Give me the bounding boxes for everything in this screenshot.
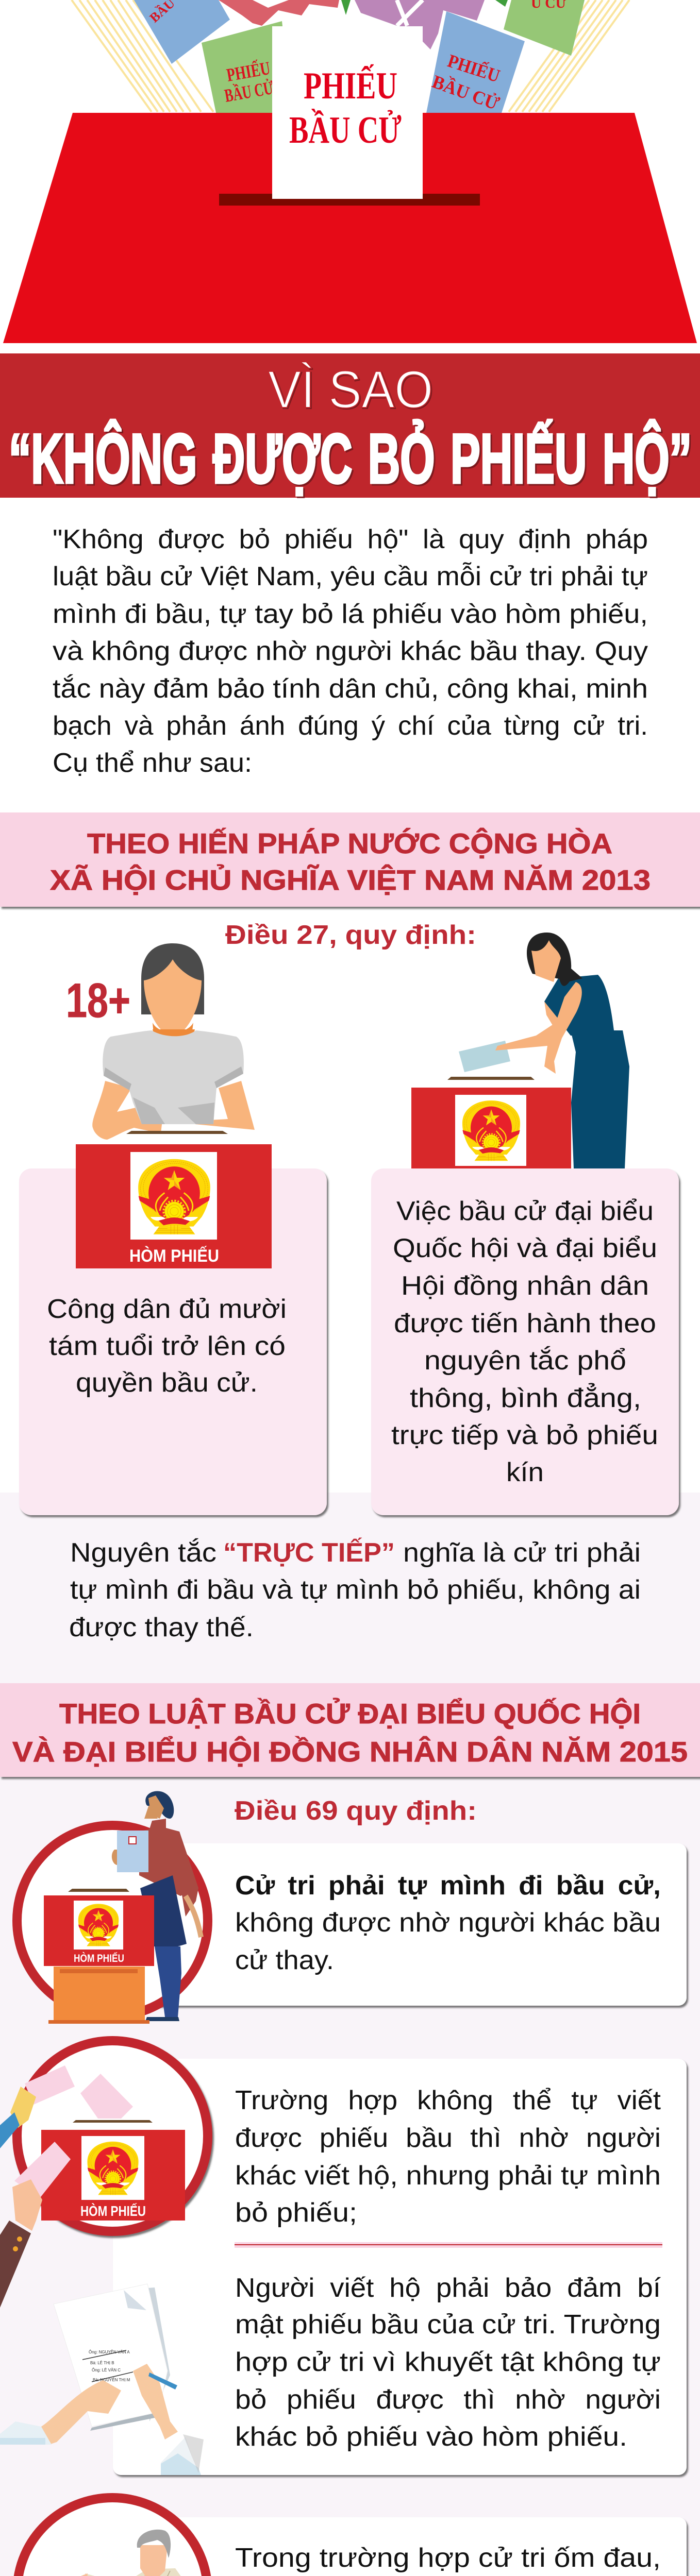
ballot: green left bbox=[202, 21, 294, 158]
card: writing ballots with help bbox=[113, 2059, 687, 2475]
top illustration: ballots entering the ballot box bbox=[3, 0, 697, 343]
direct voting principle text bbox=[69, 1537, 641, 1642]
icon: young woman voter at ballot box bbox=[92, 943, 255, 1140]
card: election principles: nguyên tắc phổ bbox=[424, 1346, 626, 1376]
card: election principles: Quốc hội và đại biểu bbox=[393, 1233, 657, 1263]
card: writing ballots with help: khác viết hộ, nhưng phải tự mình bbox=[235, 2161, 661, 2191]
ballot box: left card bbox=[76, 1144, 272, 1268]
icon: voter with ballot box in circle: HÒM PHIẾU bbox=[74, 1952, 124, 1964]
card: must vote in person: Cử tri phải tự mình đi bầu cử, bbox=[235, 1871, 661, 1901]
card: writing ballots with help: khác bỏ phiếu vào hòm phiếu. bbox=[235, 2422, 627, 2452]
card: election principles: kín bbox=[506, 1458, 544, 1487]
icon: hands placing ballots into box: HÒM PHIẾU bbox=[80, 2203, 146, 2219]
direct voting principle text: Nguyên tắc bbox=[70, 1538, 216, 1568]
ballot: blue right: BẦU CỬ bbox=[429, 71, 502, 114]
ballot: blue right bbox=[422, 11, 525, 159]
decorative rays bbox=[72, 0, 629, 112]
card: election principles: thông, bình đẳng, bbox=[410, 1383, 641, 1413]
ballot box: left card: HÒM PHIẾU bbox=[129, 1246, 219, 1266]
divider bbox=[235, 2242, 662, 2248]
ballot: green right bbox=[504, 0, 585, 56]
article 27 heading: Điều 27, quy định: bbox=[225, 920, 476, 950]
card: writing ballots with help: mật phiếu bầu của cử tri. Trường bbox=[235, 2310, 661, 2340]
ballot: blue left bbox=[134, 0, 230, 64]
title banner bbox=[0, 353, 700, 498]
icon: elderly voter in wheelchair bbox=[11, 2498, 219, 2576]
intro paragraph: bạch và phản ánh đúng ý chí của từng cử tri. bbox=[53, 711, 648, 741]
direct voting principle text: “TRỰC TIẾP” bbox=[223, 1537, 395, 1568]
section banner: election law 2015: VÀ ĐẠI BIỂU HỘI ĐỒNG NHÂN DÂN NĂM 2015 bbox=[12, 1736, 688, 1768]
card: writing ballots with help: được phiếu bầu thì nhờ người bbox=[235, 2123, 661, 2153]
card: writing ballots with help: Trường hợp không thể tự viết bbox=[235, 2086, 661, 2115]
card: must vote in person: không được nhờ người khác bầu bbox=[235, 1908, 661, 1938]
flowers bbox=[219, 0, 508, 49]
card: election principles: Việc bầu cử đại biểu bbox=[396, 1196, 654, 1226]
intro paragraph: luật bầu cử Việt Nam, yêu cầu mỗi cử tri phải tự bbox=[53, 562, 648, 591]
card: election principles bbox=[371, 1168, 679, 1515]
card: sick and disabled voters bbox=[113, 2517, 687, 2576]
section banner: election law 2015 bbox=[0, 1683, 700, 1777]
title line: Vì sao: VÌ SAO bbox=[268, 360, 433, 419]
section banner: constitution 2013: XÃ HỘI CHỦ NGHĨA VIỆT NAM NĂM 2013 bbox=[50, 864, 651, 896]
card: right to vote at eighteen: tám tuổi trở lên có bbox=[49, 1331, 286, 1361]
section banner: election law 2015: THEO LUẬT BẦU CỬ ĐẠI BIỂU QUỐC HỘI bbox=[59, 1698, 641, 1730]
intro paragraph bbox=[53, 524, 648, 778]
direct voting principle text: nghĩa là cử tri phải bbox=[403, 1538, 641, 1568]
ballot slot bbox=[219, 194, 480, 206]
card: right to vote at eighteen bbox=[19, 1168, 327, 1515]
icon: hands writing on ballot: Bà: LÊ THỊ B bbox=[90, 2361, 114, 2365]
icon: hands writing on ballot: Ông: NGUYỄN VĂN A bbox=[89, 2350, 130, 2354]
card: writing ballots with help: hợp cử tri vì khuyết tật không tự bbox=[235, 2347, 661, 2377]
card: sick and disabled voters: Trong trường hợp cử tri ốm đau, bbox=[235, 2543, 661, 2573]
icon: hands placing ballots into box bbox=[0, 2041, 208, 2308]
icon: hands writing on ballot: Bà: NGUYỄN THỊ M bbox=[93, 2378, 130, 2382]
18+ label: 18+ bbox=[66, 973, 130, 1027]
intro paragraph: Cụ thể như sau: bbox=[53, 748, 252, 778]
main ballot bbox=[272, 26, 423, 199]
card: election principles: được tiến hành theo bbox=[394, 1309, 656, 1338]
card: right to vote at eighteen: Công dân đủ mười bbox=[47, 1294, 287, 1324]
card: right to vote at eighteen: quyền bầu cử. bbox=[76, 1368, 258, 1398]
ballot: green left: BẦU CỬ bbox=[223, 77, 275, 106]
ballot: blue right: PHIẾU bbox=[445, 50, 503, 87]
card: writing ballots with help: Người viết hộ phải bảo đảm bí bbox=[235, 2273, 661, 2303]
card: election principles: Hội đồng nhân dân bbox=[401, 1271, 649, 1301]
card: must vote in person bbox=[113, 1843, 687, 2006]
section banner: constitution 2013: THEO HIẾN PHÁP NƯỚC CỘNG HÒA bbox=[87, 827, 612, 859]
direct voting principle text: được thay thế. bbox=[69, 1613, 254, 1642]
card: writing ballots with help: bỏ phiếu; bbox=[235, 2198, 357, 2228]
article 69 heading: Điều 69 quy định: bbox=[235, 1796, 477, 1826]
main ballot: BẦU CỬ bbox=[289, 109, 402, 151]
main ballot: PHIẾU bbox=[304, 64, 397, 107]
light background for lower section bbox=[0, 1493, 700, 2576]
ballot box: right card bbox=[411, 1088, 571, 1168]
icon: woman casting vote bbox=[447, 933, 629, 1168]
card: election principles: trực tiếp và bỏ phiếu bbox=[391, 1420, 658, 1450]
icon: hands writing on ballot: Ông: LÊ VĂN C bbox=[92, 2368, 121, 2372]
icon: voter with ballot box in circle bbox=[17, 1791, 208, 2024]
intro paragraph: "Không được bỏ phiếu hộ" là quy định pháp bbox=[53, 524, 648, 554]
direct voting principle text: tự mình đi bầu và tự mình bỏ phiếu, không ai bbox=[70, 1575, 641, 1605]
ballot: green left: PHIẾU bbox=[225, 58, 272, 86]
intro paragraph: tắc này đảm bảo tính dân chủ, công khai, minh bbox=[53, 674, 648, 704]
intro paragraph: và không được nhờ người khác bầu thay. Quy bbox=[53, 636, 648, 666]
card: writing ballots with help: bỏ phiếu được thì nhờ người bbox=[235, 2385, 661, 2415]
ballot box top bbox=[3, 113, 697, 343]
card: must vote in person: cử thay. bbox=[235, 1945, 334, 1975]
icon: hands writing on ballot bbox=[0, 2284, 204, 2475]
intro paragraph: mình đi bầu, tự tay bỏ lá phiếu vào hòm phiếu, bbox=[53, 599, 648, 629]
section banner: constitution 2013 bbox=[0, 812, 700, 907]
